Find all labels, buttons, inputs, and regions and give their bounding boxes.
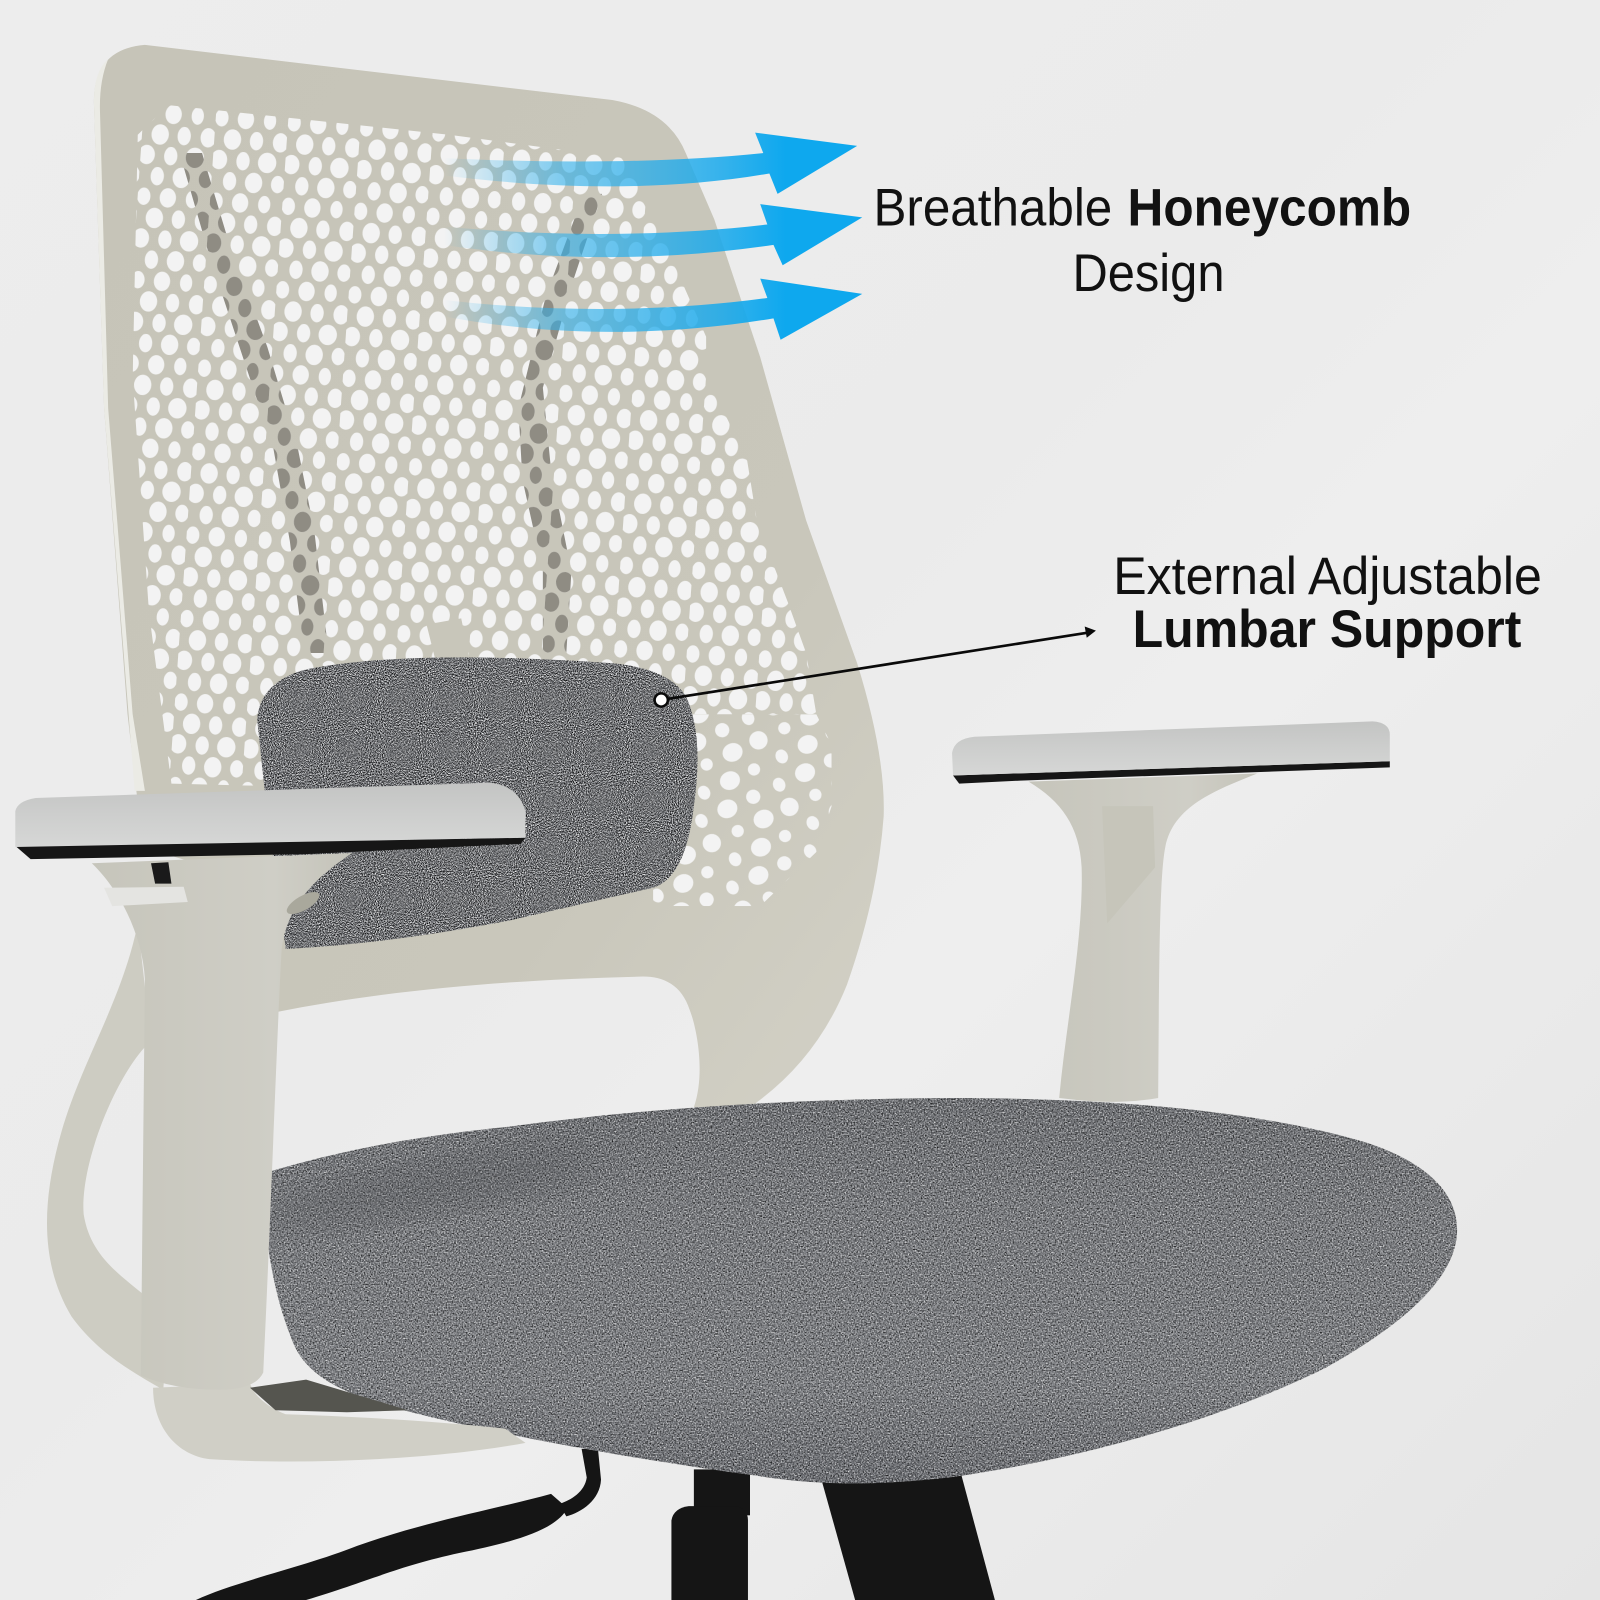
left arm pad underside [15,838,526,859]
chair base and gas lift [196,1449,995,1600]
right arm post [1029,773,1257,1102]
lumbar support cushion [257,657,698,949]
arrow 2 [444,204,862,265]
bracket body [153,1384,526,1462]
airflow arrows [444,133,862,340]
left curved strut [47,923,168,1390]
post slot [151,862,171,884]
pointer arrow to lumbar cushion [655,627,1096,707]
shell body [94,45,884,1107]
height adjust button [104,887,188,906]
lever cord [559,1449,601,1516]
lumbar support line: Lumbar Support [1133,600,1522,659]
honeycomb word: Honeycomb [1128,179,1411,238]
pointer line [667,633,1088,699]
right arm pad underside [953,761,1390,784]
breathable word: Breathable [873,179,1112,238]
gas lift neck [694,1469,750,1515]
external adjustable line: External Adjustable [1113,547,1542,606]
tilt lever [196,1494,567,1600]
design word: Design [1072,244,1224,303]
gas lift cylinder [671,1506,748,1600]
post recess [284,888,323,918]
left arm pad [15,783,526,847]
backrest shell [94,45,884,1107]
right arm pad [952,721,1390,776]
callout: breathable honeycomb design [873,179,1411,303]
seat cushion [253,1098,1457,1483]
bracket shadow [250,1380,408,1412]
base leg [821,1474,995,1600]
right armrest [952,721,1390,1102]
arrow 3 [444,279,862,340]
base bracket [153,1380,526,1462]
arrow 1 [444,133,857,194]
solid area at spine [427,618,471,673]
callout: external adjustable lumbar support [1113,547,1542,659]
shell light rim [94,59,145,791]
left armrest [15,783,526,1390]
dark rib shadows behind holes [184,153,602,653]
seat fabric [263,1098,1457,1483]
pointer head [1085,627,1096,638]
honeycomb perforations [122,97,827,791]
left arm post [92,853,352,1390]
pointer dot [655,693,668,707]
right arm post ridge [1102,806,1155,923]
seat shadow crease [253,1133,604,1245]
lower right large holes [653,714,832,906]
